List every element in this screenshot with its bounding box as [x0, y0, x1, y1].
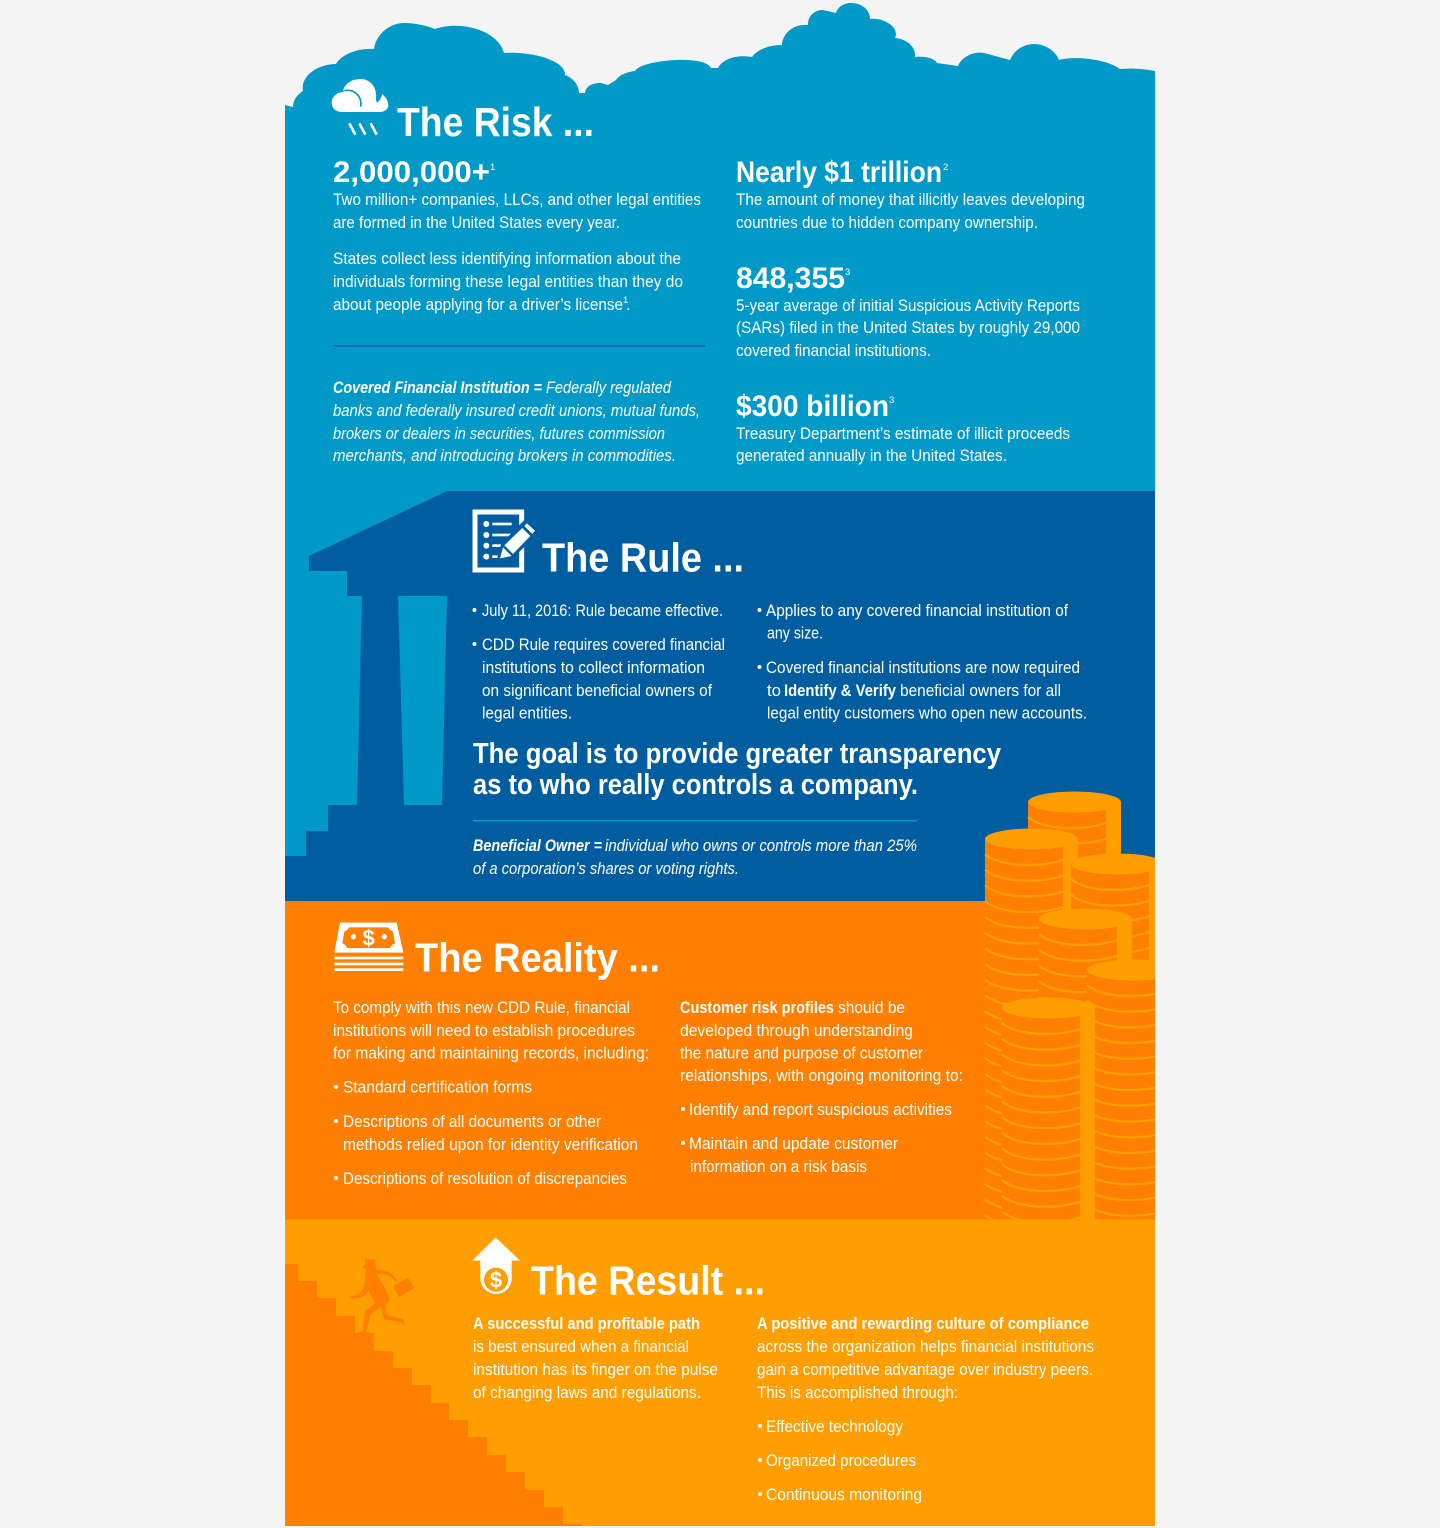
stat: 848,355: 848,355	[736, 262, 845, 295]
stat: 848,355: covered financial institutions.	[736, 342, 931, 360]
stat: 2,000,000+: 1	[490, 162, 495, 173]
list: record procedures: methods relied upon for identity verification	[343, 1136, 638, 1154]
list: rule left column: on significant beneficial owners of	[482, 682, 712, 700]
list: customer risk profiles	[680, 999, 963, 1176]
text: successful path: is best ensured when a financial	[473, 1338, 689, 1356]
stat: nearly $1 trillion: Nearly $1 trillion	[736, 156, 942, 189]
list: rule right column: any size.	[767, 624, 823, 642]
illustration: bank columns	[285, 491, 447, 856]
list: culture of compliance: Organized procedures	[766, 1452, 916, 1470]
list: record procedures: Standard certification forms	[343, 1078, 532, 1096]
heading: the result: The Result ...	[531, 1258, 765, 1304]
list: customer risk profiles: Maintain and update customer	[689, 1135, 898, 1153]
callout: goal statement: The goal is to provide greater transparency	[473, 738, 1001, 770]
definition: covered financial institution: brokers or dealers in securities, futures commission	[333, 425, 665, 443]
icon: stack of money	[334, 923, 403, 971]
text: successful path	[473, 1315, 718, 1402]
text: states collect: .	[626, 296, 631, 314]
illustration: coin stacks	[984, 792, 1155, 1220]
list: record procedures: Descriptions of resolution of discrepancies	[343, 1170, 627, 1188]
list: culture of compliance: This is accomplished through:	[757, 1384, 958, 1402]
list: record procedures: for making and maintaining records, including:	[333, 1044, 649, 1062]
illustration: descending staircase	[285, 1264, 582, 1526]
definition: covered financial institution: Covered Financial Institution =	[333, 379, 542, 397]
list: rule left column: CDD Rule requires covered financial	[482, 636, 725, 654]
icon: stack of money: $	[363, 925, 375, 950]
list: culture of compliance	[757, 1315, 1094, 1504]
stat: nearly $1 trillion: The amount of money that illicitly leaves developing	[736, 191, 1085, 209]
list: rule left column: legal entities.	[482, 704, 572, 722]
callout: goal statement	[473, 738, 1001, 801]
list: culture of compliance: Continuous monitoring	[766, 1486, 922, 1504]
stat: $300 billion: $300 billion	[736, 390, 889, 423]
stat: 848,355: 3	[845, 267, 850, 278]
stat: $300 billion: generated annually in the United States.	[736, 447, 1007, 465]
text: successful path: of changing laws and regulations.	[473, 1384, 701, 1402]
text: states collect: 1	[623, 295, 628, 306]
list: rule right column: Applies to any covered financial institution of	[766, 602, 1068, 620]
list: customer risk profiles: Identify and report suspicious activities	[689, 1101, 952, 1119]
panel: the reality	[285, 901, 1155, 1220]
list: customer risk profiles: should be	[838, 999, 905, 1017]
list: rule left column: July 11, 2016: Rule became effective.	[482, 602, 723, 620]
list: customer risk profiles: the nature and purpose of customer	[680, 1044, 923, 1062]
list: rule right column: legal entity customers who open new accounts.	[767, 704, 1087, 722]
icon: rain cloud	[332, 79, 388, 135]
definition: beneficial owner	[473, 837, 917, 878]
text: successful path: institution has its finger on the pulse	[473, 1361, 718, 1379]
stat: 848,355	[736, 262, 1080, 360]
definition: covered financial institution: merchants, and introducing brokers in commodities.	[333, 447, 676, 465]
heading: the reality: The Reality ...	[415, 934, 660, 980]
stat: nearly $1 trillion	[736, 156, 1085, 232]
definition: covered financial institution	[333, 379, 700, 465]
panel: the result	[285, 1220, 1155, 1526]
text: companies formed: Two million+ companies, LLCs, and other legal entities	[333, 191, 701, 209]
stat: 2,000,000+: 2,000,000+	[333, 156, 490, 189]
list: culture of compliance: across the organization helps financial institutions	[757, 1338, 1094, 1356]
stat: $300 billion	[736, 390, 1070, 465]
list: customer risk profiles: information on a risk basis	[690, 1158, 867, 1176]
text: states collect: about people applying for a driver’s license	[333, 296, 623, 314]
heading: the risk: The Risk ...	[397, 99, 594, 145]
list: culture of compliance: Effective technology	[766, 1418, 904, 1436]
list: rule right column	[758, 602, 1087, 722]
panel: the risk	[285, 3, 1155, 491]
definition: beneficial owner: individual who owns or controls more than 25%	[605, 837, 917, 855]
definition: covered financial institution: Federally regulated	[546, 379, 672, 397]
text: companies formed	[333, 191, 701, 232]
text: states collect	[333, 250, 683, 314]
stat: nearly $1 trillion: countries due to hidden company ownership.	[736, 214, 1038, 232]
stat: nearly $1 trillion: 2	[943, 162, 948, 173]
heading: the rule: The Rule ...	[542, 534, 744, 580]
definition: beneficial owner: Beneficial Owner =	[473, 837, 602, 855]
text: states collect: individuals forming these legal entities than they do	[333, 273, 683, 291]
list: record procedures: Descriptions of all documents or other	[343, 1113, 601, 1131]
icon: checklist and pencil	[475, 512, 539, 570]
definition: beneficial owner: of a corporation’s shares or voting rights.	[473, 860, 739, 878]
list: rule left column: institutions to collect information	[482, 659, 705, 677]
illustration: running businessman	[349, 1259, 414, 1333]
list: rule right column: Identify & Verify	[784, 682, 897, 700]
list: record procedures: To comply with this new CDD Rule, financial	[333, 999, 630, 1017]
stat: $300 billion: Treasury Department’s estimate of illicit proceeds	[736, 425, 1070, 443]
list: record procedures	[333, 999, 649, 1188]
text: states collect: States collect less identifying information about the	[333, 250, 681, 268]
stat: $300 billion: 3	[889, 395, 894, 406]
list: culture of compliance: A positive and rewarding culture of compliance	[757, 1315, 1089, 1333]
list: culture of compliance: gain a competitive advantage over industry peers.	[757, 1361, 1093, 1379]
stat: 848,355: (SARs) filed in the United States by roughly 29,000	[736, 319, 1080, 337]
callout: goal statement: as to who really controls a company.	[473, 769, 918, 801]
icon: arrow with dollar coin: $	[490, 1268, 502, 1293]
list: customer risk profiles: relationships, with ongoing monitoring to:	[680, 1067, 963, 1085]
list: customer risk profiles: Customer risk profiles	[680, 999, 834, 1017]
stat: 848,355: 5-year average of initial Suspicious Activity Reports	[736, 297, 1080, 315]
panel: the rule	[285, 491, 1155, 901]
cloud skyline background	[285, 3, 1155, 491]
list: rule right column: beneficial owners for all	[900, 682, 1061, 700]
text: companies formed: are formed in the United States every year.	[333, 214, 620, 232]
icon: arrow with dollar coin	[472, 1237, 520, 1294]
list: rule right column: to	[767, 682, 781, 700]
list: rule left column	[472, 602, 725, 722]
list: record procedures: institutions will need to establish procedures	[333, 1022, 635, 1040]
text: successful path: A successful and profitable path	[473, 1315, 700, 1333]
definition: covered financial institution: banks and federally insured credit unions, mutual funds,	[333, 402, 700, 420]
list: rule right column: Covered financial institutions are now required	[766, 659, 1080, 677]
list: customer risk profiles: developed through understanding	[680, 1022, 913, 1040]
